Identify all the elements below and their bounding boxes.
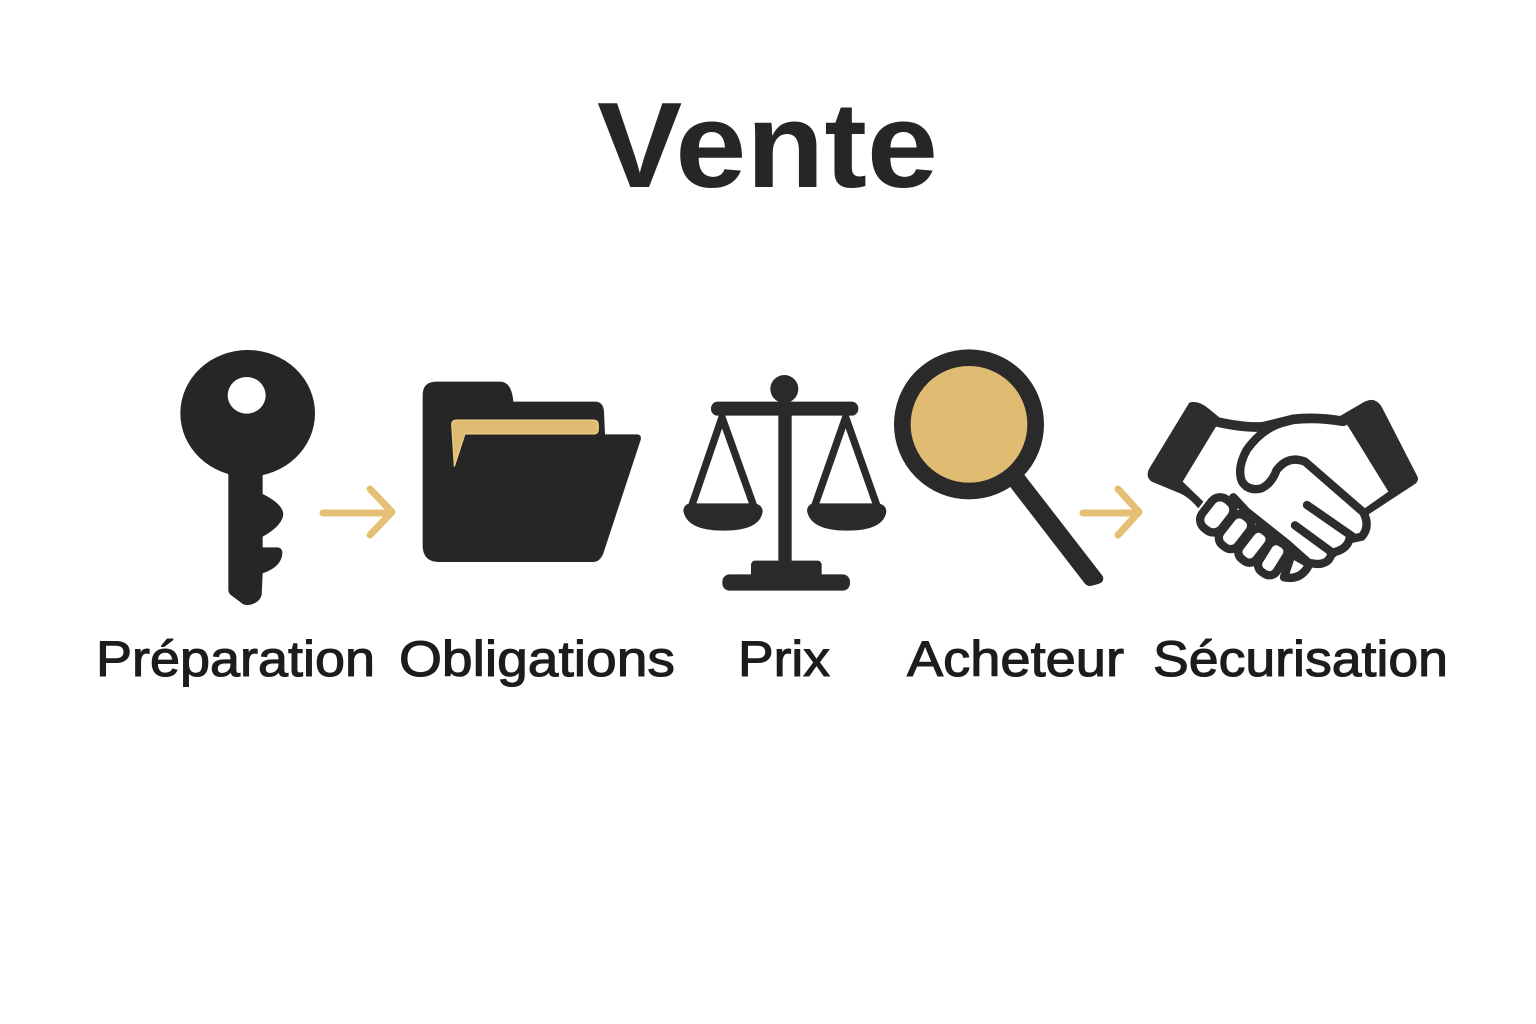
icon: folder	[423, 382, 641, 562]
icon: key	[180, 350, 315, 605]
arrow: key to folder	[323, 489, 392, 535]
label: Acheteur: Acheteur	[907, 631, 1124, 687]
icon: magnifying glass	[902, 358, 1103, 586]
icon: handshake	[1148, 400, 1418, 579]
label: Obligations: Obligations	[399, 631, 675, 687]
label: Prix: Prix	[738, 631, 830, 687]
label: Sécurisation: Sécurisation	[1153, 631, 1448, 687]
icon: scales	[683, 375, 886, 591]
arrow: magnifier to handshake	[1083, 489, 1139, 535]
title: Vente	[597, 77, 938, 213]
label: Préparation: Préparation	[96, 631, 375, 687]
